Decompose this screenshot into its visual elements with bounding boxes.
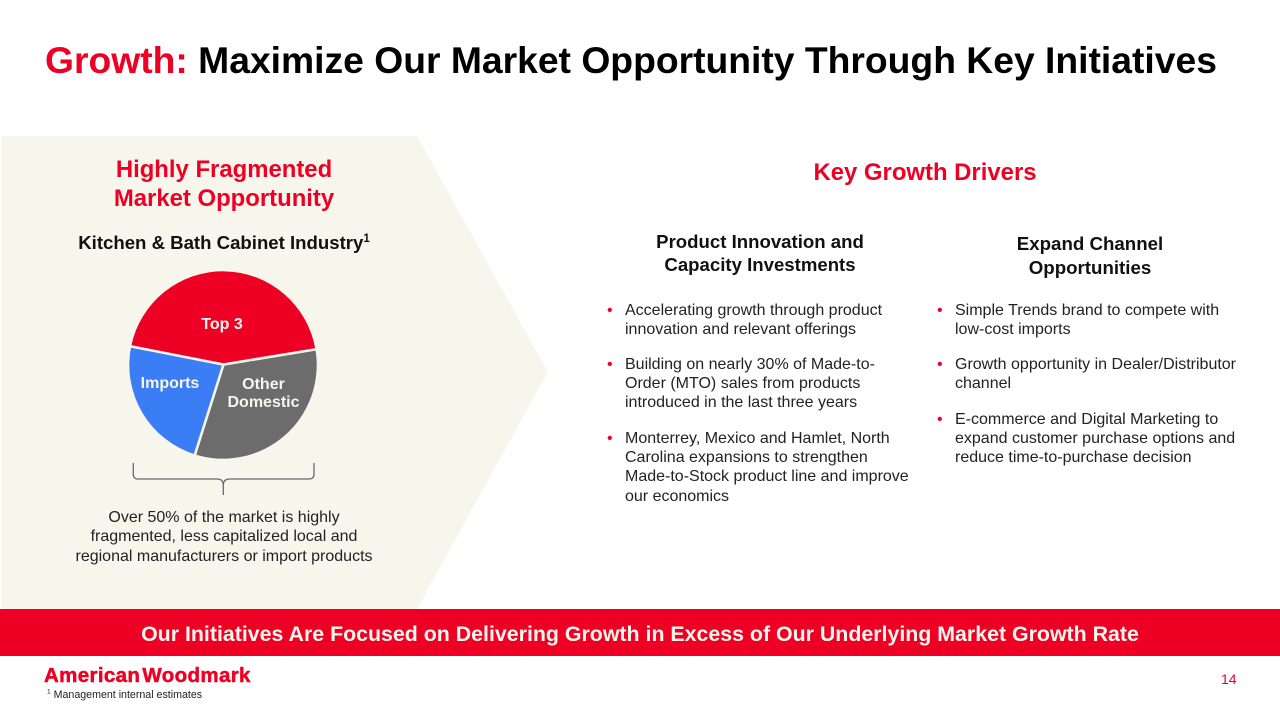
- label: Other Domestic: Other: [242, 376, 285, 393]
- bullet: product innovation: Accelerating growth through product: [625, 302, 882, 319]
- heading: key growth drivers: Key Growth Drivers: [813, 159, 1037, 186]
- pie chart: [129, 271, 317, 495]
- bullet: dealer distributor: [955, 355, 1236, 393]
- pie chart subtitle: Kitchen & Bath Cabinet Industry1: [78, 232, 370, 253]
- banner: Our Initiatives Are Focused on Delivering Growth in Excess of Our Underlying Market Growth Rate: [141, 622, 1139, 646]
- title: Growth: Maximize Our Market Opportunity Through Key Initiatives: [45, 39, 1217, 81]
- bullet: dealer distributor: channel: [955, 375, 1011, 392]
- bullet: simple trends: [955, 301, 1219, 339]
- column heading: product innovation: Product Innovation and: [656, 231, 864, 252]
- bullet: made-to-order: [625, 355, 875, 413]
- bullet: dealer distributor: Growth opportunity in Dealer/Distributor: [955, 356, 1236, 373]
- bullet: made-to-order: Building on nearly 30% of Made-to-: [625, 356, 875, 373]
- panel heading: market opportunity: [114, 156, 334, 212]
- bullet: e-commerce: reduce time-to-purchase decision: [955, 449, 1192, 466]
- bullet: made-to-order: Order (MTO) sales from products: [625, 375, 860, 392]
- footnote: 1 Management internal estimates: [47, 688, 202, 701]
- market note: Over 50% of the market is highly: [108, 508, 340, 526]
- bullets: expand channel: [938, 302, 1236, 466]
- label: Other Domestic: Domestic: [227, 394, 300, 411]
- market note: regional manufacturers or import products: [75, 548, 373, 564]
- slice: Imports: [129, 346, 224, 454]
- bullet: expansions: [625, 429, 909, 506]
- label: Top 3: Top 3: [201, 316, 243, 333]
- bullet: expansions: our economics: [625, 488, 729, 505]
- column heading: product innovation: Capacity Investments: [664, 254, 856, 275]
- page number: 14: [1221, 671, 1237, 687]
- slice: Top 3: [131, 271, 315, 364]
- column heading: product innovation: [656, 231, 864, 275]
- slice: Other Domestic: [195, 350, 317, 459]
- market note: [75, 508, 373, 564]
- panel heading: market opportunity: Market Opportunity: [114, 185, 334, 212]
- bullet: e-commerce: E-commerce and Digital Marketing to: [955, 411, 1218, 428]
- bullet: expansions: Carolina expansions to strengthen: [625, 449, 868, 466]
- bullet: expansions: Monterrey, Mexico and Hamlet, North: [625, 430, 890, 447]
- bullet: simple trends: Simple Trends brand to compete with: [955, 302, 1219, 319]
- bullet: made-to-order: introduced in the last three years: [625, 394, 857, 411]
- bullet: product innovation: [625, 301, 882, 339]
- column heading: expand channel: [1017, 233, 1163, 278]
- slice dividers: [129, 346, 318, 456]
- bullet: e-commerce: [955, 410, 1235, 468]
- column heading: expand channel: Expand Channel: [1017, 233, 1163, 254]
- bullet: product innovation: innovation and relevant offerings: [625, 321, 856, 338]
- market note: fragmented, less capitalized local and: [91, 528, 357, 545]
- logo wordmark: American Woodmark: [44, 664, 251, 687]
- bullets: product innovation: [608, 302, 909, 505]
- panel heading: market opportunity: Highly Fragmented: [116, 156, 332, 183]
- bracket: [133, 463, 314, 495]
- column heading: expand channel: Opportunities: [1029, 256, 1151, 278]
- bullet: simple trends: low-cost imports: [955, 321, 1071, 338]
- bullet: e-commerce: expand customer purchase options and: [955, 430, 1235, 447]
- banner: [0, 609, 1280, 656]
- bullet: expansions: Made-to-Stock product line and improve: [625, 468, 909, 485]
- label: Imports: Imports: [141, 375, 199, 392]
